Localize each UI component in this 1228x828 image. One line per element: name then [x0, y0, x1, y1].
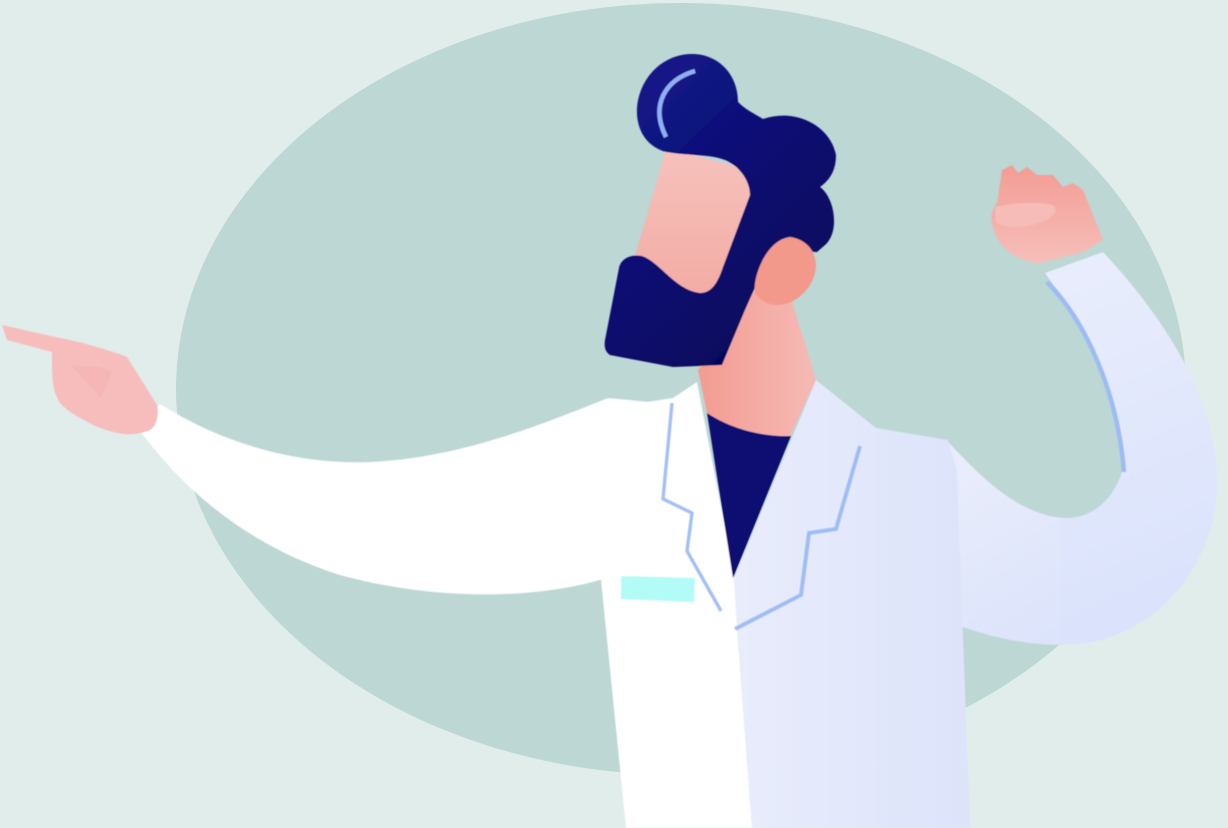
- left pointing hand: [2, 325, 158, 434]
- badge: [621, 576, 695, 602]
- right sleeve: [946, 252, 1217, 645]
- coat body: [601, 380, 970, 828]
- left arm: white sleeve: [138, 398, 680, 594]
- hair and beard: [605, 54, 836, 367]
- hair highlight: [659, 71, 695, 137]
- shirt: [707, 413, 791, 578]
- face: [633, 148, 752, 300]
- coat: left white panel: [601, 382, 752, 828]
- fist highlight: [995, 203, 1056, 227]
- left collar outline: [663, 403, 721, 611]
- hand shading: [71, 365, 112, 398]
- ear: [755, 237, 816, 305]
- sleeve seam panel: [948, 442, 1060, 644]
- right sleeve fold line: [1047, 282, 1124, 472]
- neck: [698, 290, 816, 436]
- right fist: [991, 165, 1103, 263]
- coat: right panel: [734, 380, 970, 828]
- background ellipse: [176, 3, 1186, 775]
- right collar outline: [735, 446, 860, 629]
